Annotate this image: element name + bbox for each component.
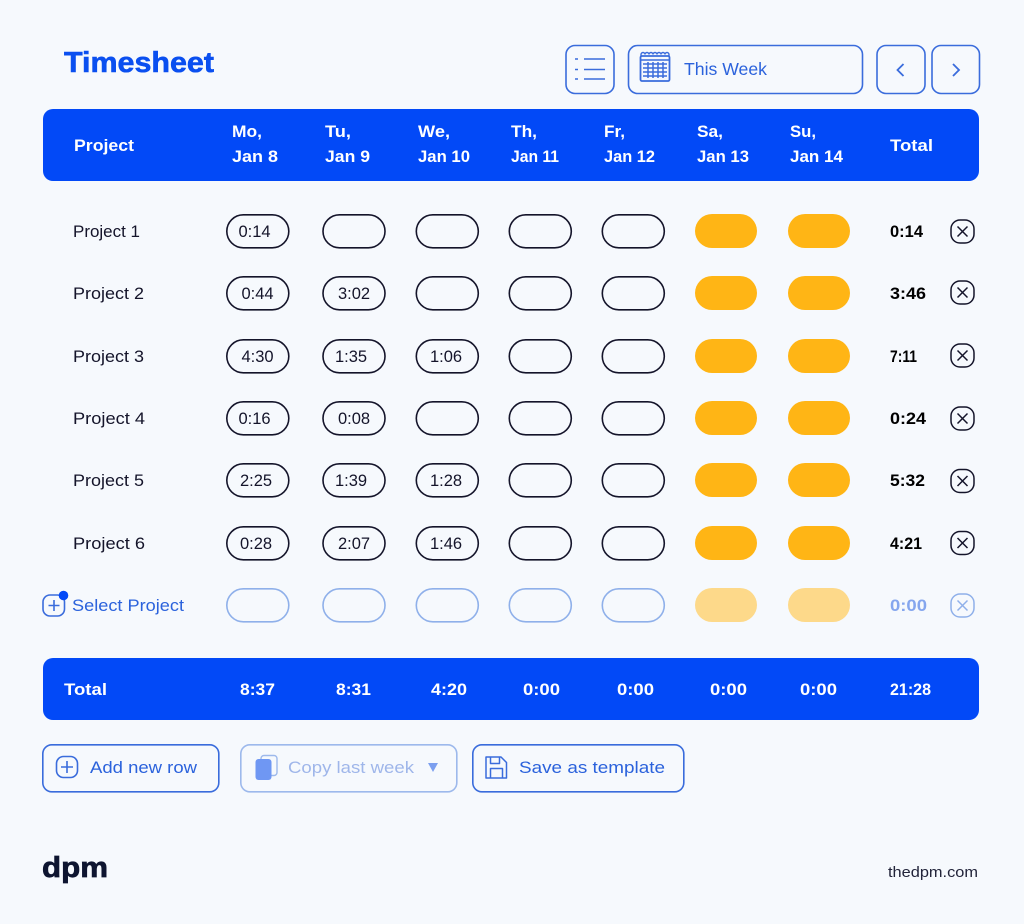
table header bar: Project <box>74 137 135 155</box>
row: Project 6: 1:46 <box>430 535 462 553</box>
table header bar: Total <box>890 137 933 155</box>
table header bar: Jan 10 <box>418 148 470 166</box>
row: Project 6: Project 6 <box>73 535 145 553</box>
button: add new row: Add new row <box>90 758 198 777</box>
table header bar: Su, <box>790 123 816 141</box>
totals bar: 8:37 <box>240 681 275 699</box>
row: Select Project (inactive): 0:00 <box>890 597 927 615</box>
row: Project 6: 2:07 <box>338 535 370 553</box>
table header bar <box>43 109 979 181</box>
button: save as template: Save as template <box>519 758 665 777</box>
row: Project 3: 7:11 <box>890 348 917 366</box>
date selector: This Week <box>684 59 767 79</box>
totals bar: 4:20 <box>431 681 467 699</box>
row: Project 3: 4:30 <box>241 348 274 366</box>
row: Project 5: 5:32 <box>890 472 925 490</box>
row: Project 5: 1:39 <box>335 472 367 490</box>
row: Project 4 <box>73 401 974 435</box>
row: Project 3: 1:35 <box>335 348 367 366</box>
row: Project 2: 3:02 <box>338 285 370 303</box>
icon: list view button <box>566 46 614 94</box>
table header bar: Sa, <box>697 123 723 141</box>
row: Project 5: 2:25 <box>240 472 272 490</box>
row: Project 4: 0:16 <box>238 410 271 428</box>
row: Project 6 <box>73 526 974 560</box>
totals bar: 0:00 <box>523 681 560 699</box>
toolbar <box>566 46 980 94</box>
row: Project 3: Project 3 <box>73 348 144 366</box>
table header bar: Jan 8 <box>232 148 278 166</box>
row: Project 1: 0:14 <box>238 223 271 241</box>
website url: thedpm.com <box>888 865 978 881</box>
button: copy last week: Copy last week <box>288 758 415 777</box>
row: Project 1 <box>73 214 974 248</box>
totals bar <box>43 658 979 720</box>
row: Project 2: 3:46 <box>890 285 926 303</box>
table header bar: Jan 9 <box>325 148 370 166</box>
table header bar: Jan 12 <box>604 148 655 166</box>
table header bar: Tu, <box>325 123 351 141</box>
row: Project 3: 1:06 <box>430 348 462 366</box>
row: Select Project (inactive): Select Project <box>72 597 184 615</box>
row: Project 5: Project 5 <box>73 472 144 490</box>
row: Project 5: 1:28 <box>430 472 462 490</box>
table header bar: Fr, <box>604 123 625 141</box>
button: copy last week <box>241 745 457 792</box>
row: Project 2: Project 2 <box>73 285 144 303</box>
table header bar: Jan 14 <box>790 148 844 166</box>
table header bar: Jan 13 <box>697 148 749 166</box>
date selector <box>628 46 862 94</box>
row: Project 4: Project 4 <box>73 410 145 428</box>
row: Project 6: 0:28 <box>240 535 272 553</box>
logo: dpm: dpm <box>42 852 108 884</box>
icon: previous arrow button <box>877 46 925 94</box>
row: Project 1: Project 1 <box>73 223 140 241</box>
row: Project 5 <box>73 463 974 497</box>
totals bar: 0:00 <box>710 681 747 699</box>
table header bar: Th, <box>511 123 537 141</box>
row: Project 3 <box>73 339 974 373</box>
icon: add project <box>43 591 68 616</box>
button: save as template <box>473 745 684 792</box>
totals bar: 21:28 <box>890 681 931 699</box>
title: Timesheet <box>64 47 214 79</box>
button: add new row <box>43 745 219 792</box>
row: Project 4: 0:08 <box>338 410 370 428</box>
row: Project 2: 0:44 <box>241 285 274 303</box>
row: Select Project (inactive) <box>43 588 974 622</box>
totals bar: 0:00 <box>617 681 654 699</box>
icon: next arrow button <box>932 46 980 94</box>
totals bar: Total <box>64 681 107 699</box>
table header bar: Mo, <box>232 123 262 141</box>
table header bar: We, <box>418 123 450 141</box>
row: Project 6: 4:21 <box>890 535 922 553</box>
row: Project 1: 0:14 <box>890 223 924 241</box>
totals bar: 8:31 <box>336 681 371 699</box>
row: Project 2 <box>73 276 974 310</box>
row: Project 4: 0:24 <box>890 410 927 428</box>
totals bar: 0:00 <box>800 681 837 699</box>
table header bar: Jan 11 <box>511 148 559 166</box>
